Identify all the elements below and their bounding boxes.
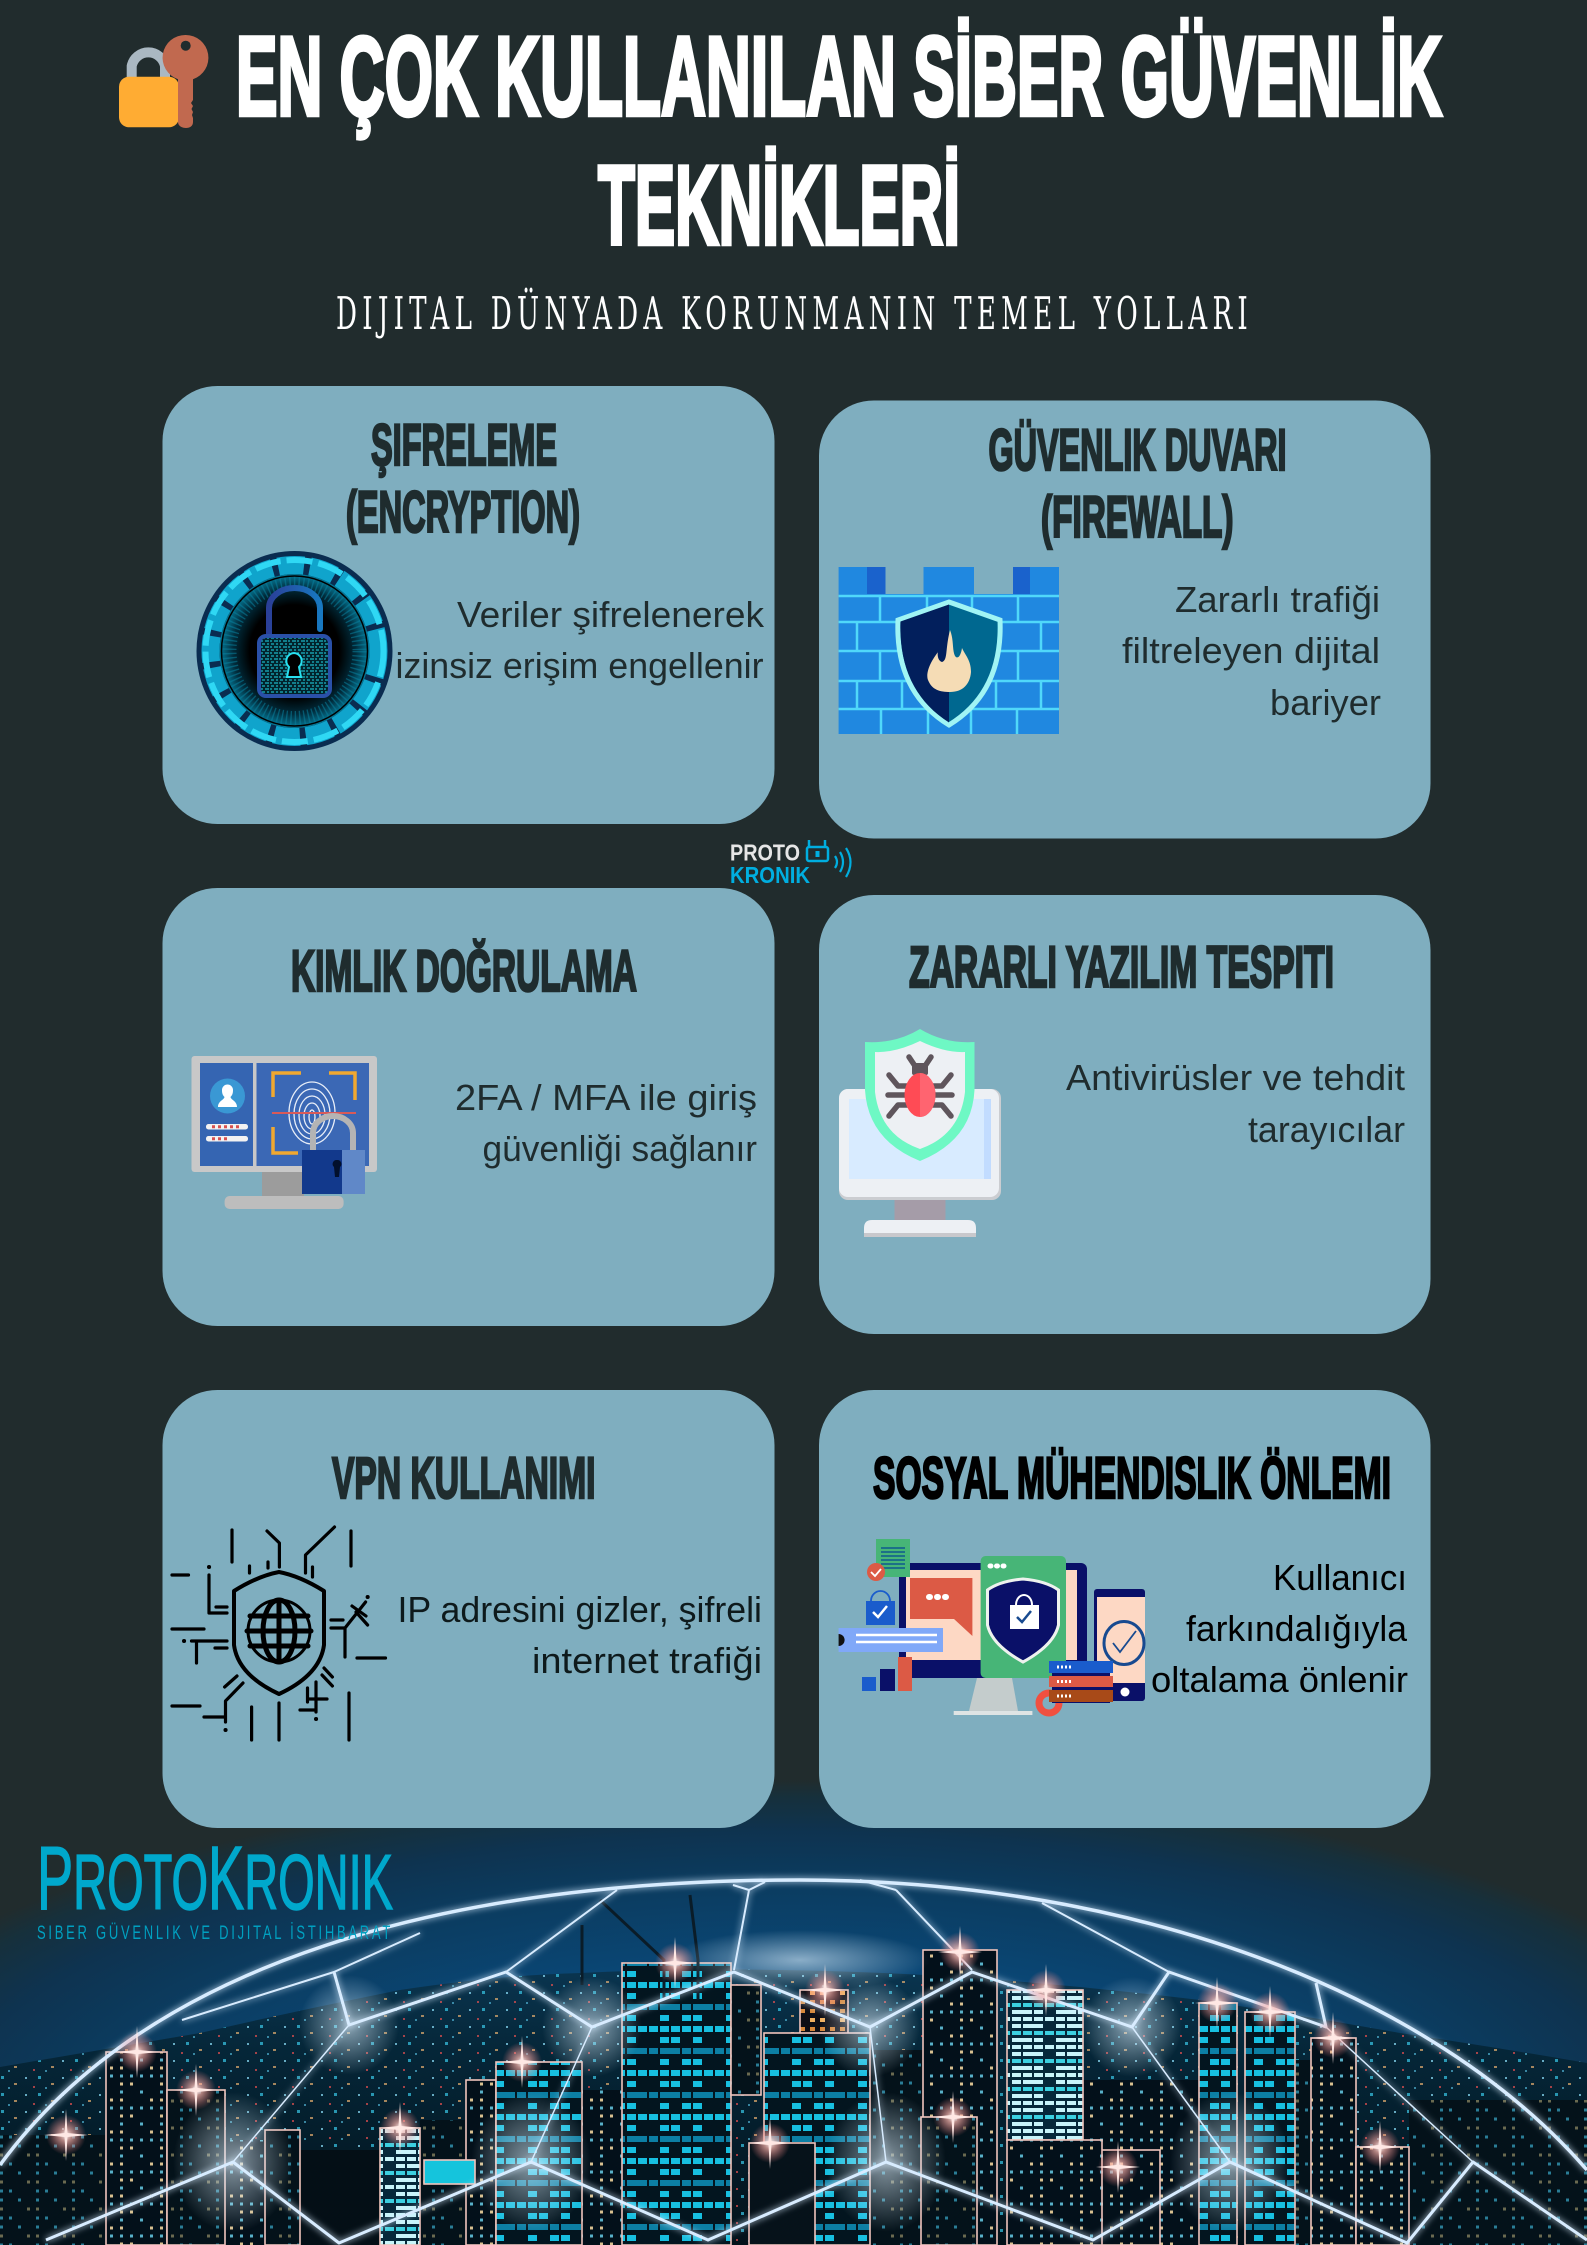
description: social engineering prevention: oltalama önlenir bbox=[1151, 1659, 1408, 1700]
panel: firewall bbox=[819, 400, 1430, 838]
heading: firewall bbox=[988, 418, 1286, 550]
background blocks bbox=[0, 2050, 1587, 2245]
panel: VPN usage bbox=[162, 1390, 774, 1828]
heading: VPN usage: VPN KULLANIMI bbox=[332, 1446, 596, 1511]
icon: lock with key bbox=[119, 35, 208, 128]
brand logo: ProtoKronik bbox=[37, 1829, 393, 1944]
logo: small ProtoKronik mark bbox=[730, 840, 850, 888]
description: encryption bbox=[396, 594, 765, 686]
brand name: PROTOKRONIK bbox=[37, 1829, 393, 1929]
description: encryption: izinsiz erişim engellenir bbox=[396, 645, 764, 686]
description: firewall: Zararlı trafiği bbox=[1175, 579, 1380, 620]
skyline towers bbox=[106, 1950, 1409, 2245]
icon: monitor with fingerprint and padlock bbox=[192, 1056, 377, 1209]
haze around network nodes bbox=[173, 1930, 1290, 2232]
description: social engineering prevention: Kullanıcı bbox=[1273, 1557, 1407, 1598]
description: VPN usage: IP adresini gizler, şifreli bbox=[398, 1589, 762, 1630]
description: malware detection bbox=[1066, 1057, 1405, 1150]
description: VPN usage bbox=[398, 1589, 762, 1681]
panel: malware detection bbox=[819, 895, 1430, 1334]
description: firewall: bariyer bbox=[1270, 682, 1381, 723]
icon: devices with security shield bbox=[839, 1539, 1145, 1715]
description: firewall bbox=[1122, 579, 1381, 723]
panel: social engineering prevention bbox=[819, 1390, 1430, 1828]
heading: firewall: (FIREWALL) bbox=[1041, 485, 1234, 550]
logo: small ProtoKronik mark: PROTO bbox=[730, 840, 800, 866]
city network image bbox=[0, 1775, 1587, 2245]
description: social engineering prevention bbox=[1151, 1557, 1408, 1700]
title: TEKNİKLERİ bbox=[598, 143, 960, 268]
panel: authentication bbox=[162, 888, 774, 1326]
description: VPN usage: internet trafiği bbox=[532, 1640, 762, 1681]
description: encryption: Veriler şifrelenerek bbox=[457, 594, 765, 635]
description: malware detection: Antivirüsler ve tehdit bbox=[1066, 1057, 1405, 1098]
title bbox=[236, 14, 1442, 268]
description: authentication: güvenliği sağlanır bbox=[482, 1128, 757, 1169]
heading: firewall: GÜVENLIK DUVARI bbox=[988, 418, 1286, 483]
spark highlights bbox=[44, 1926, 1402, 2193]
icon: monitor with bug shield bbox=[839, 1029, 1001, 1237]
icon: brick wall with shield bbox=[839, 567, 1059, 734]
panel: encryption bbox=[162, 386, 774, 824]
brand tagline: SIBER GÜVENLIK VE DIJITAL İSTIHBARAT bbox=[37, 1923, 393, 1944]
description: social engineering prevention: farkındalığıyla bbox=[1186, 1608, 1408, 1649]
logo: small ProtoKronik mark: KRONIK bbox=[730, 862, 810, 888]
heading: authentication: KIMLIK DOĞRULAMA bbox=[291, 939, 637, 1004]
description: authentication: 2FA / MFA ile giriş bbox=[455, 1077, 757, 1118]
description: firewall: filtreleyen dijital bbox=[1122, 630, 1380, 671]
description: malware detection: tarayıcılar bbox=[1248, 1109, 1405, 1150]
heading: encryption bbox=[346, 413, 580, 545]
heading: encryption: ŞIFRELEME bbox=[371, 413, 557, 478]
heading: encryption: (ENCRYPTION) bbox=[346, 480, 580, 545]
description: authentication bbox=[455, 1077, 757, 1169]
icon: circuit shield with globe bbox=[172, 1527, 386, 1740]
glowing network lines bbox=[0, 1880, 1587, 2243]
cranes bbox=[582, 1895, 698, 2000]
icon: digital padlock bbox=[196, 551, 392, 751]
